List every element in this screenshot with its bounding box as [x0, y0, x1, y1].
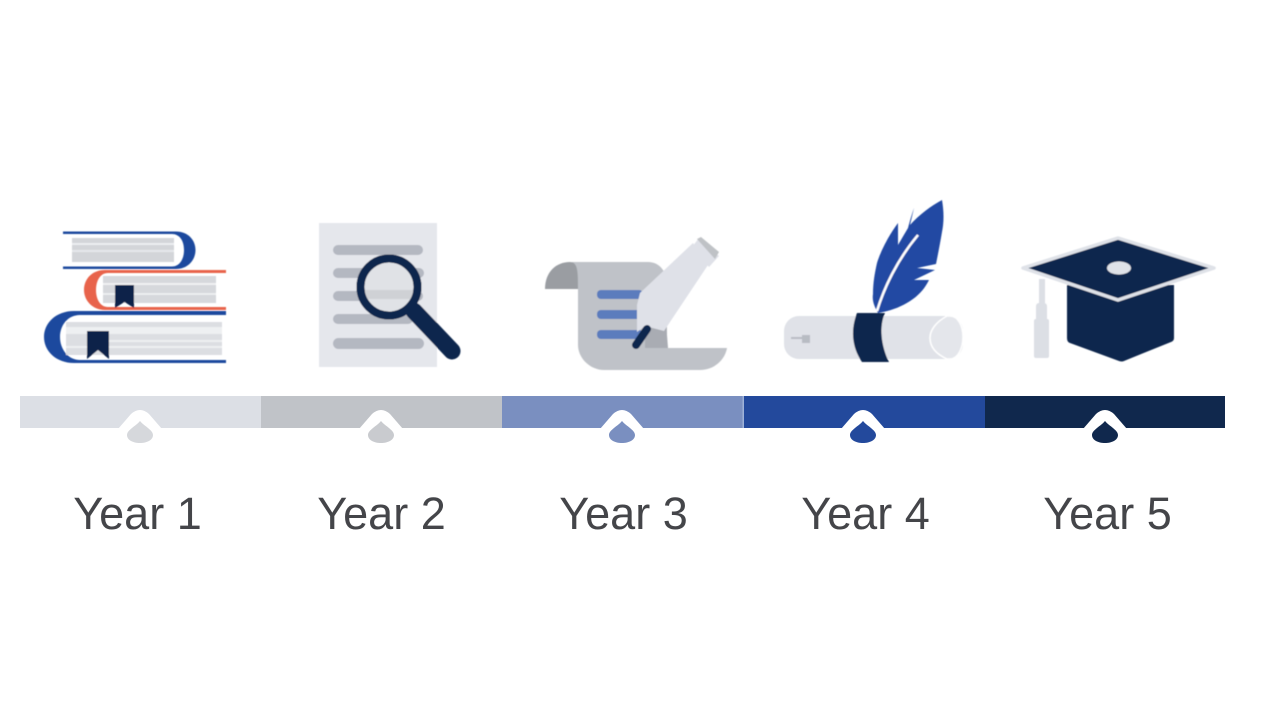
scroll body — [570, 262, 727, 370]
timeline bar — [20, 396, 1225, 428]
nib shadow — [645, 322, 668, 348]
label: Year 2: Year 2 — [317, 488, 446, 539]
bookmark — [87, 331, 109, 359]
scroll curl — [545, 262, 579, 289]
diploma end — [930, 316, 963, 359]
feather shaft — [877, 235, 918, 311]
segment 2 — [261, 396, 502, 428]
label: Year 3: Year 3 — [559, 488, 688, 539]
tassel — [1034, 279, 1049, 358]
marker: Year 5 — [1083, 410, 1127, 446]
label: Year 4: Year 4 — [801, 488, 930, 539]
middle orange book — [84, 270, 226, 310]
segment 5 — [985, 396, 1225, 428]
cap base — [1067, 285, 1174, 362]
icon: document with magnifying glass (Year 2) — [319, 223, 452, 367]
marker: Year 4 — [841, 410, 885, 446]
scroll lines — [597, 290, 643, 339]
bottom blue book — [44, 311, 226, 363]
top blue book — [63, 232, 196, 269]
marker: Year 2 — [359, 410, 403, 446]
marker: Year 3 — [600, 410, 644, 446]
document lines — [333, 245, 424, 349]
diploma roll — [784, 316, 963, 359]
marker: Year 1 — [118, 410, 162, 446]
icon: stack of books (Year 1) — [44, 232, 226, 363]
mortarboard — [1023, 238, 1214, 300]
segment 1 — [20, 396, 261, 428]
label: Year 1: Year 1 — [73, 488, 202, 539]
label: Year 5: Year 5 — [1043, 488, 1172, 539]
magnifying glass — [360, 258, 452, 351]
pen — [636, 237, 719, 345]
diploma tab — [791, 337, 809, 339]
bookmark — [115, 285, 134, 308]
segment 4 — [743, 396, 985, 428]
icon: scroll and pen (Year 3) — [545, 237, 727, 370]
segment 3 — [502, 396, 743, 428]
button — [1107, 262, 1131, 274]
feather — [873, 200, 944, 313]
icon: graduation cap (Year 5) — [1023, 238, 1214, 362]
diploma band — [853, 313, 889, 362]
icon: feather quill and diploma (Year 4) — [784, 200, 963, 362]
document page — [319, 223, 437, 367]
